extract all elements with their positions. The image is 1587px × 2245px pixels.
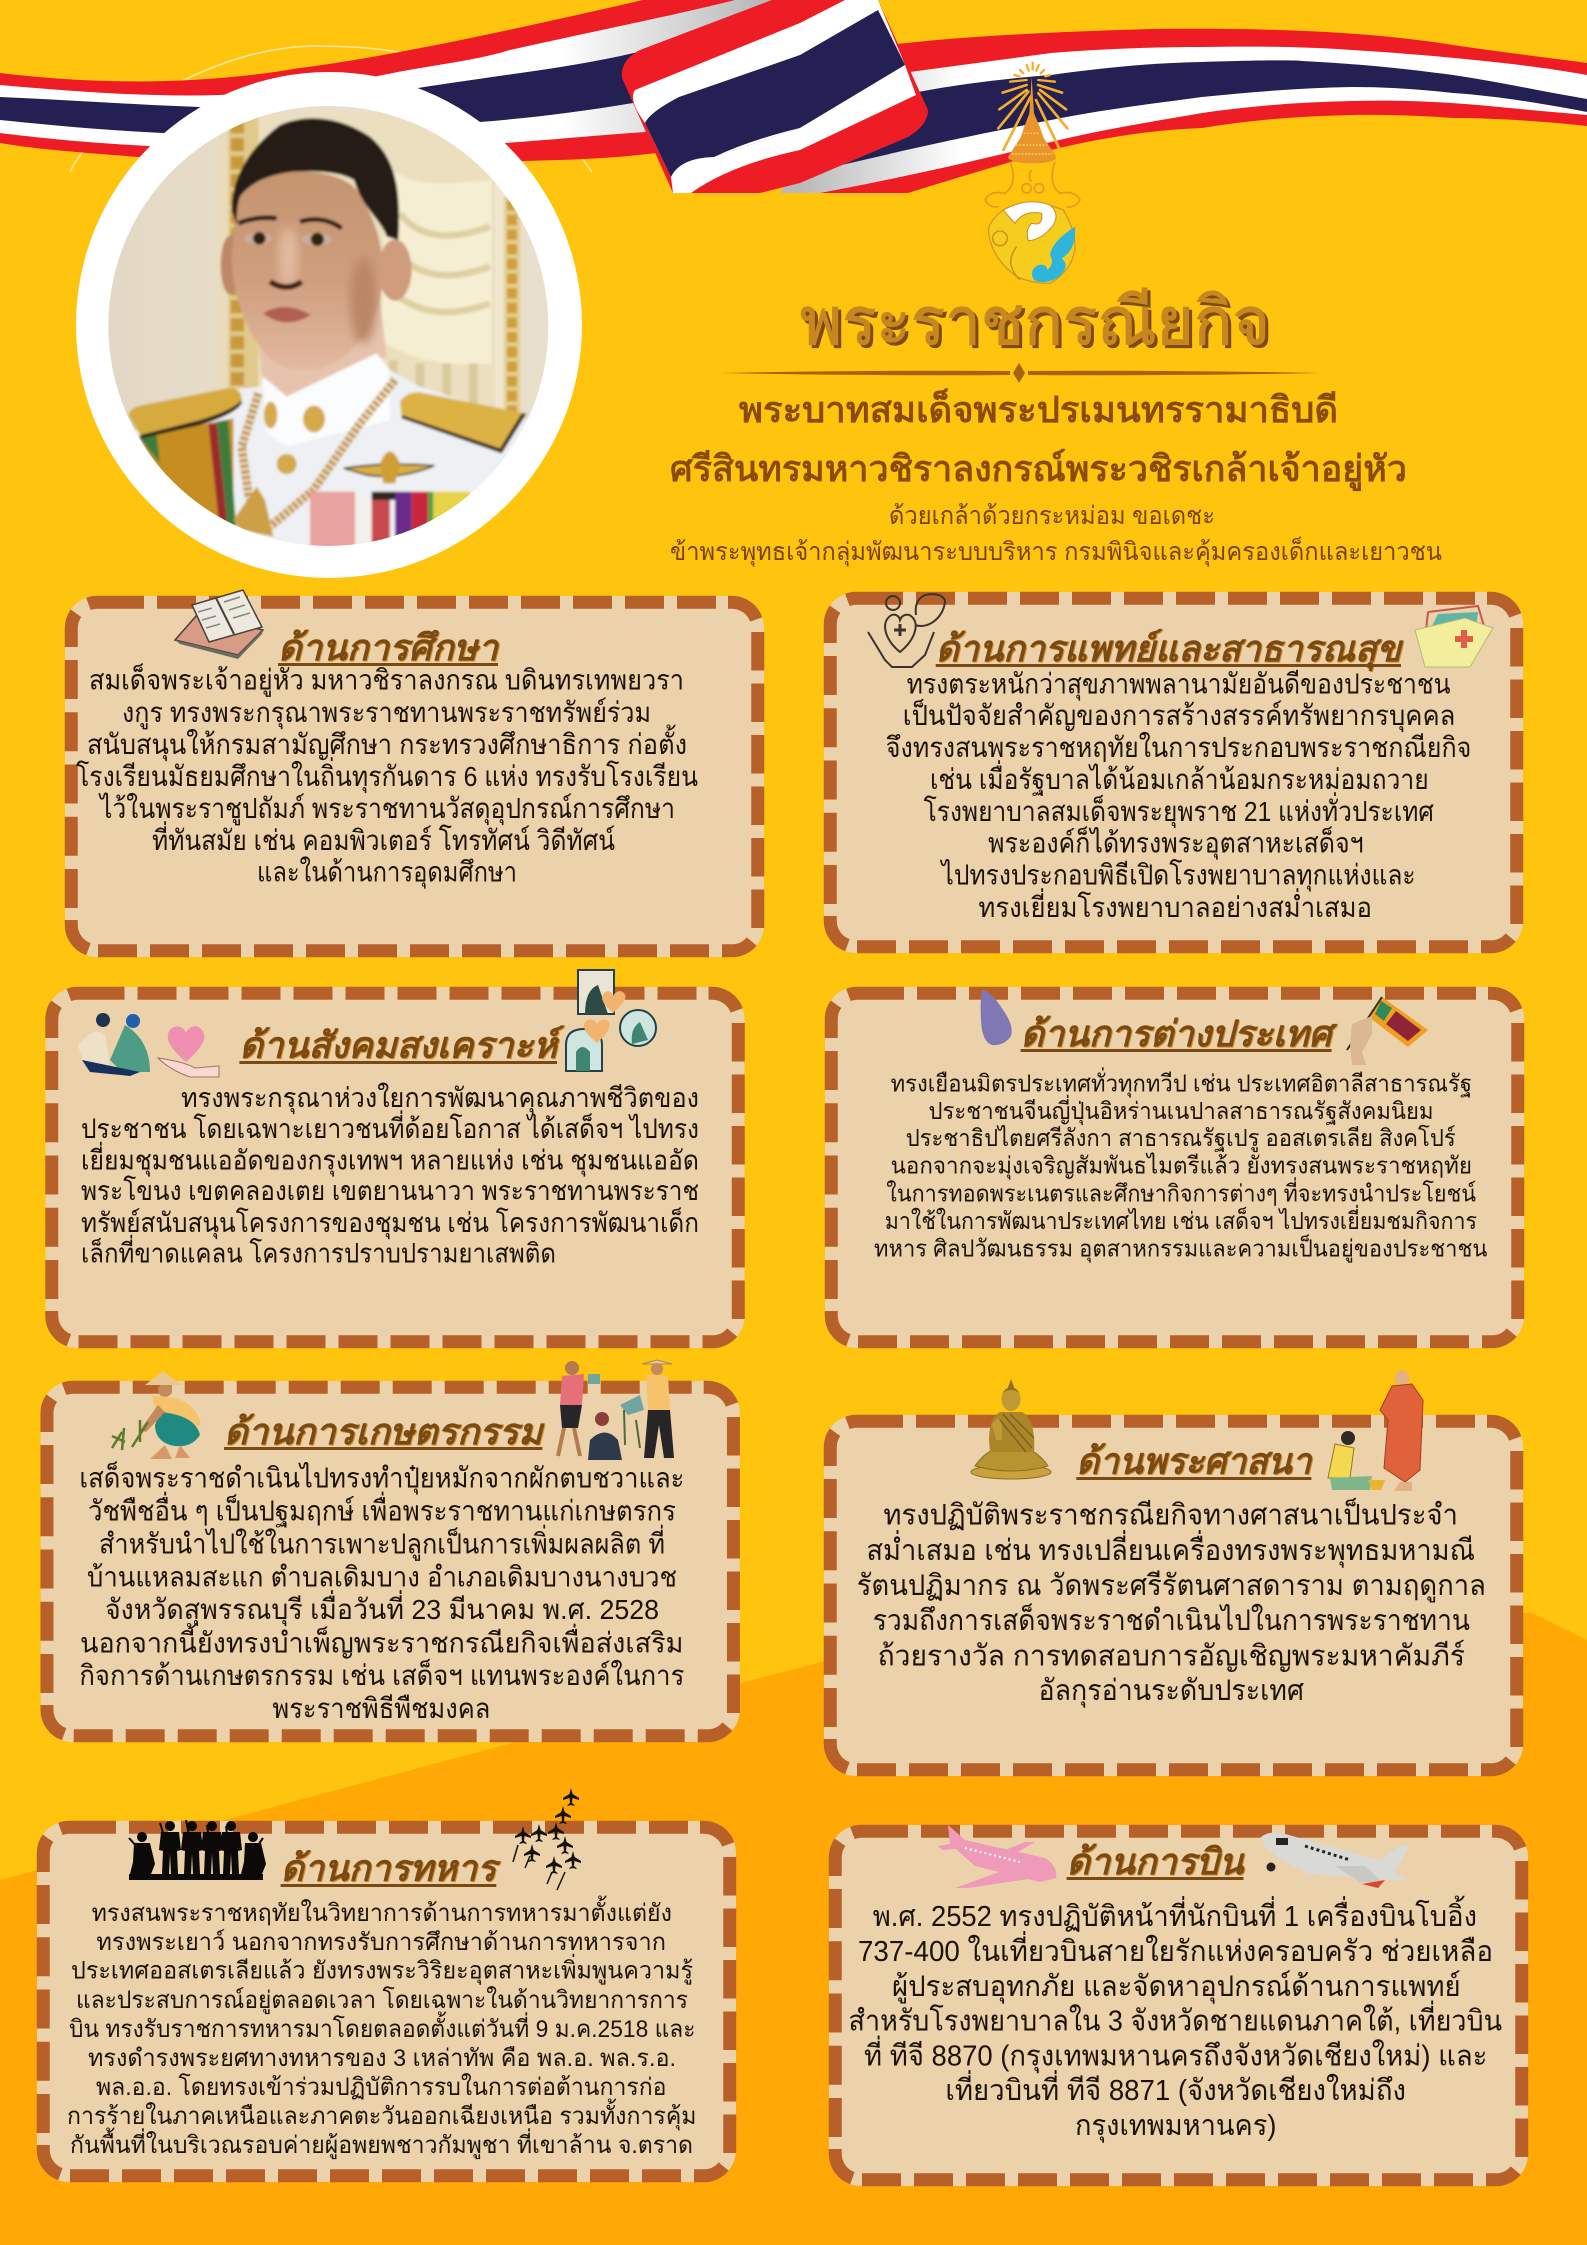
text: aviation <box>848 1895 1502 2143</box>
heading: social welfare: ด้านสังคมสงเคราะห์ <box>239 1025 565 1066</box>
subtitle lines: พระบาทสมเด็จพระปรเมนทรรามาธิบดี <box>739 387 1338 430</box>
subtitle lines: ข้าพระพุทธเจ้ากลุ่มพัฒนาระบบบริหาร กรมพินิจและคุ้มครองเด็กและเยาวชน <box>670 536 1442 567</box>
text: religion: รัตนปฏิมากร ณ วัดพระศรีรัตนศาสดาราม ตามฤดูกาล <box>857 1570 1486 1603</box>
text: education: สนับสนุนให้กรมสามัญศึกษา กระทรวงศึกษาธิการ ก่อตั้ง <box>87 724 687 762</box>
text: military: ทรงดำรงพระยศทางทหารของ 3 เหล่าทัพ คือ พล.อ. พล.ร.อ. <box>88 2045 676 2072</box>
panel: foreign affairs <box>825 987 1524 1348</box>
portrait: white ring <box>76 72 582 578</box>
text: foreign affairs: ประชาชนจีนญี่ปุ่นอิหร่านเนปาลสาธารณรัฐสังคมนิยม <box>928 1094 1434 1125</box>
icon: window people and hearts <box>566 970 656 1071</box>
text: agriculture: บ้านแหลมสะแก ตำบลเดิมบาง อำเภอเดิมบางนางบวช <box>87 1562 677 1593</box>
text: foreign affairs: ทรงเยือนมิตรประเทศทั่วทุกทวีป เช่น ประเทศอิตาลีสาธารณรัฐ <box>891 1066 1472 1097</box>
icon: hand holding sri lanka flag <box>1347 997 1428 1065</box>
icon: gardeners with watering can <box>558 1360 674 1460</box>
panel: social welfare <box>46 970 744 1348</box>
icon: royal emblem <box>985 63 1080 283</box>
text: social welfare: เล็กที่ขาดแคลน โครงการปราบปรามยาเสพติด <box>81 1235 556 1269</box>
icon: golden buddha <box>971 1379 1051 1479</box>
text: aviation: สำหรับโรงพยาบาลใน 3 จังหวัดชายแดนภาคใต้, เที่ยวบิน <box>848 2001 1502 2038</box>
text: medicine and public health: เช่น เมื่อรัฐบาลได้น้อมเกล้าน้อมกระหม่อมถวาย <box>930 760 1429 796</box>
text: aviation: พ.ศ. 2552 ทรงปฏิบัติหน้าที่นักบินที่ 1 เครื่องบินโบอิ้ง <box>873 1895 1477 1933</box>
panel: religion <box>824 1370 1523 1776</box>
heading: aviation: ด้านการบิน <box>1067 1841 1245 1882</box>
text: agriculture <box>79 1460 684 1724</box>
icon: medical kit <box>1415 606 1493 667</box>
heading: education: ด้านการศึกษา <box>278 627 500 668</box>
text: military <box>67 1895 696 2160</box>
text: agriculture: พระราชพิธีพืชมงคล <box>272 1693 490 1724</box>
text: agriculture: จังหวัดสุพรรณบุรี เมื่อวันที่ 23 มีนาคม พ.ศ. 2528 <box>105 1590 659 1627</box>
text: foreign affairs: ในการทอดพระเนตรและศึกษากิจการต่างๆ ที่จะทรงนำประโยชน์ <box>886 1176 1476 1206</box>
text: education: งกูร ทรงพระกรุณาพระราชทานพระราชทรัพย์ร่วม <box>122 697 651 730</box>
text: military: ทรงพระเยาว์ นอกจากทรงรับการศึกษาด้านการทหารจาก <box>96 1928 666 1956</box>
text: medicine and public health <box>886 668 1471 923</box>
text: social welfare: เยี่ยมชุมชนแออัดของกรุงเทพฯ หลายแห่ง เช่น ชุมชนแออัด <box>81 1142 699 1178</box>
text: military: การร้ายในภาคเหนือและภาคตะวันออกเฉียงเหนือ รวมทั้งการคุ้ม <box>67 2098 696 2131</box>
text: military: ประเทศออสเตรเลียแล้ว ยังทรงพระวิริยะอุตสาหะเพิ่มพูนความรู้ <box>71 1954 693 1986</box>
text: aviation: 737-400 ในเที่ยวบินสายใยรักแห่งครอบครัว ช่วยเหลือ <box>858 1931 1493 1968</box>
panel: agriculture <box>41 1360 740 1742</box>
text: education <box>76 662 698 890</box>
text: religion: รวมถึงการเสด็จพระราชดำเนินไปในการพระราชทาน <box>873 1602 1470 1637</box>
text: social welfare: ทรงพระกรุณาห่วงใยการพัฒนาคุณภาพชีวิตของ <box>181 1082 699 1115</box>
icon: grey airplane <box>1260 1833 1410 1888</box>
text: foreign affairs: ทหาร ศิลปวัฒนธรรม อุตสาหกรรมและความเป็นอยู่ของประชาชน <box>874 1234 1487 1264</box>
text: military: กันพื้นที่ในบริเวณรอบค่ายผู้อพยพชาวกัมพูชา ที่เขาล้าน จ.ตราด <box>70 2127 693 2160</box>
subtitle lines: ด้วยเกล้าด้วยกระหม่อม ขอเดชะ <box>889 502 1215 530</box>
text: social welfare: ทรัพย์สนับสนุนโครงการของชุมชน เช่น โครงการพัฒนาเด็ก <box>81 1205 699 1240</box>
ribbon: left thai flag band <box>0 0 780 164</box>
text: religion: อัลกุรอ่านระดับประเทศ <box>1038 1675 1305 1708</box>
text: medicine and public health: ทรงตระหนักว่าสุขภาพพลานามัยอันดีของประชาชน <box>907 668 1451 701</box>
icon: hands heart stethoscope <box>868 594 945 667</box>
heading: religion: ด้านพระศาสนา <box>1076 1440 1313 1482</box>
portrait: king in white uniform <box>100 100 561 560</box>
panel: education <box>65 590 764 957</box>
text: medicine and public health: ทรงเยี่ยมโรงพยาบาลอย่างสม่ำเสมอ <box>978 888 1372 923</box>
text: foreign affairs: นอกจากจะมุ่งเจริญสัมพันธไมตรีแล้ว ยังทรงสนพระราชหฤทัย <box>891 1152 1472 1180</box>
text: aviation: กรุงเทพมหานคร) <box>1075 2110 1276 2143</box>
panel: aviation <box>829 1825 1528 2186</box>
text: military: และประสบการณ์อยู่ตลอดเวลา โดยเฉพาะในด้านวิทยาการการ <box>76 1986 688 2015</box>
text: education: โรงเรียนมัธยมศึกษาในถิ่นทุรกันดาร 6 แห่ง ทรงรับโรงเรียน <box>76 757 698 794</box>
text: military: ทรงสนพระราชหฤทัยในวิทยาการด้านการทหารมาตั้งแต่ยัง <box>92 1895 672 1927</box>
title divider with diamond <box>721 363 1319 383</box>
icon: sri lanka map <box>981 990 1012 1045</box>
text: religion: ถ้วยรางวัล การทดสอบการอัญเชิญพระมหาคัมภีร์ <box>878 1639 1465 1672</box>
subtitle lines: ศรีสินทรมหาวชิราลงกรณ์พระวชิรเกล้าเจ้าอยู่หัว <box>670 448 1407 492</box>
text: religion: สม่ำเสมอ เช่น ทรงเปลี่ยนเครื่องทรงพระพุทธมหามณี <box>866 1530 1475 1568</box>
icon: farmer planting <box>112 1371 201 1459</box>
heading: agriculture: ด้านการเกษตรกรรม <box>224 1411 545 1452</box>
text: military: พล.อ.อ. โดยทรงเข้าร่วมปฏิบัติการรบในการต่อต้านการก่อ <box>96 2073 666 2101</box>
icon: books <box>175 590 263 659</box>
text: medicine and public health: ไปทรงประกอบพิธีเปิดโรงพยาบาลทุกแห่งและ <box>940 858 1416 892</box>
icon: fighter jets formation <box>513 1788 581 1890</box>
text: religion: ทรงปฏิบัติพระราชกรณียกิจทางศาสนาเป็นประจำ <box>883 1496 1458 1531</box>
heading: foreign affairs: ด้านการต่างประเทศ <box>1021 1013 1338 1054</box>
text: foreign affairs: ประชาธิปไตยศรีลังกา สาธารณรัฐเปรู ออสเตรเลีย สิงคโปร์ <box>906 1125 1456 1153</box>
text: aviation: เที่ยวบินที่ ทีจี 8871 (จังหวัดเชียงใหม่ถึง <box>945 2070 1406 2107</box>
text: agriculture: กิจการด้านเกษตรกรรม เช่น เสด็จฯ แทนพระองค์ในการ <box>79 1658 684 1691</box>
text: education: ที่ทันสมัย เช่น คอมพิวเตอร์ โทรทัศน์ วิดีทัศน์ <box>152 821 615 856</box>
text: agriculture: สำหรับนำไปใช้ในการเพาะปลูกเป็นการเพิ่มผลผลิต ที่ <box>99 1524 665 1561</box>
text: medicine and public health: จึงทรงสนพระราชหฤทัยในการประกอบพระราชกณียกิจ <box>886 731 1471 763</box>
subtitle lines <box>670 387 1442 567</box>
text: medicine and public health: พระองค์ก็ได้ทรงพระอุตสาหะเสด็จฯ <box>988 826 1364 861</box>
heading: medicine and public health: ด้านการแพทย์และสาธารณสุข <box>936 628 1404 671</box>
text: aviation: ผู้ประสบอุทกภัย และจัดหาอุปกรณ์ด้านการแพทย์ <box>892 1970 1461 2004</box>
icon: pink airplane <box>938 1825 1056 1888</box>
icon: monk receiving alms <box>1328 1370 1423 1491</box>
text: education: ไว้ในพระราชูปถัมภ์ พระราชทานวัสดุอุปกรณ์การศึกษา <box>98 792 675 826</box>
text: foreign affairs: มาใช้ในการพัฒนาประเทศไทย เช่น เสด็จฯ ไปทรงเยี่ยมชมกิจการ <box>885 1204 1477 1234</box>
decorative thin arc behind portrait <box>70 46 592 172</box>
icon: people helping and heart <box>78 1013 219 1077</box>
text: social welfare: ประชาชน โดยเฉพาะเยาวชนที่ด้อยโอกาส ได้เสด็จฯ ไปทรง <box>81 1110 699 1144</box>
text: education: และในด้านการอุดมศึกษา <box>257 856 517 890</box>
ribbon: right thai flag band <box>780 29 1587 193</box>
text: foreign affairs <box>874 1066 1487 1264</box>
text: military: บิน ทรงรับราชการทหารมาโดยตลอดตั้งแต่วันที่ 9 ม.ค.2518 และ <box>69 2011 696 2043</box>
title: พระราชกรณียกิจ <box>800 284 1270 358</box>
text: agriculture: วัชพืชอื่น ๆ เป็นปฐมฤกษ์ เพื่อพระราชทานแก่เกษตรกร <box>88 1492 676 1528</box>
text: agriculture: นอกจากนี้ยังทรงบำเพ็ญพระราชกรณียกิจเพื่อส่งเสริม <box>80 1622 683 1658</box>
text: education: สมเด็จพระเจ้าอยู่หัว มหาวชิราลงกรณ บดินทรเทพยวรา <box>89 662 684 698</box>
icon: soldier silhouettes <box>129 1820 266 1880</box>
text: social welfare <box>81 1082 699 1269</box>
heading: military: ด้านการทหาร <box>281 1848 502 1889</box>
flag fold panel <box>622 0 928 193</box>
text: religion <box>857 1496 1486 1708</box>
panel: military <box>37 1788 736 2182</box>
text: medicine and public health: โรงพยาบาลสมเด็จพระยุพราช 21 แห่งทั่วประเทศ <box>924 792 1434 829</box>
text: aviation: ที่ ทีจี 8870 (กรุงเทพมหานครถึงจังหวัดเชียงใหม่) และ <box>864 2035 1487 2073</box>
text: agriculture: เสด็จพระราชดำเนินไปทรงทำปุ๋ยหมักจากผักตบชวาและ <box>79 1460 684 1496</box>
text: social welfare: พระโขนง เขตคลองเตย เขตยานนาวา พระราชทานพระราช <box>81 1176 699 1206</box>
text: medicine and public health: เป็นปัจจัยสำคัญของการสร้างสรรค์ทรัพยากรบุคคล <box>903 698 1455 733</box>
panel: medicine and public health <box>824 592 1523 953</box>
